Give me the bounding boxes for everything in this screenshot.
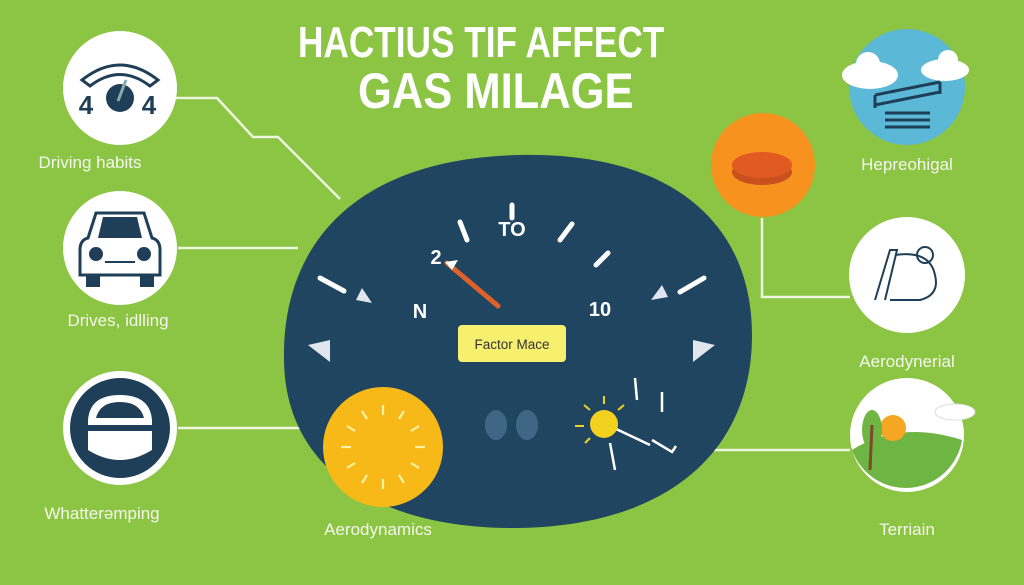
text: Hepreohigal: [861, 155, 953, 174]
icon: driving habits: 4: [79, 90, 94, 120]
icon: weather: [63, 371, 177, 485]
numbers: N: [413, 301, 427, 323]
text: Drives, idlling: [67, 311, 169, 330]
text: Terriain: [879, 520, 935, 539]
arrows: [308, 285, 715, 362]
icon: orange disc: [711, 113, 815, 217]
gauge panel: [284, 155, 752, 528]
text: Whatterəmping: [44, 504, 160, 523]
callout: factor mace: Factor Mace: [474, 337, 550, 352]
connector lines: [175, 98, 850, 450]
icon: aerodynamics: [849, 217, 965, 333]
needle: [447, 263, 498, 306]
title: HACTIUS TIF AFFECT: [298, 18, 664, 67]
dots: [485, 410, 507, 440]
title: [298, 18, 664, 119]
ticks: [320, 205, 704, 292]
icon: car: [63, 191, 177, 305]
numbers: TO: [498, 219, 526, 241]
numbers: 10: [589, 299, 611, 321]
text: Aerodynerial: [859, 352, 955, 371]
numbers: 2: [430, 247, 442, 269]
icon: driving habits: [63, 31, 177, 145]
icon: driving habits: 4: [142, 90, 157, 120]
labels: Driving habits: [38, 153, 142, 172]
title: GAS MILAGE: [358, 63, 634, 119]
callout: factor mace: [458, 325, 566, 362]
icon: terrain: [850, 378, 975, 492]
numbers: [413, 219, 611, 323]
icon: sun hands: [610, 378, 676, 470]
icon: clouds bridge: [842, 29, 969, 145]
text: Aerodynamics: [324, 520, 432, 539]
icon: yellow dial: [323, 387, 443, 507]
